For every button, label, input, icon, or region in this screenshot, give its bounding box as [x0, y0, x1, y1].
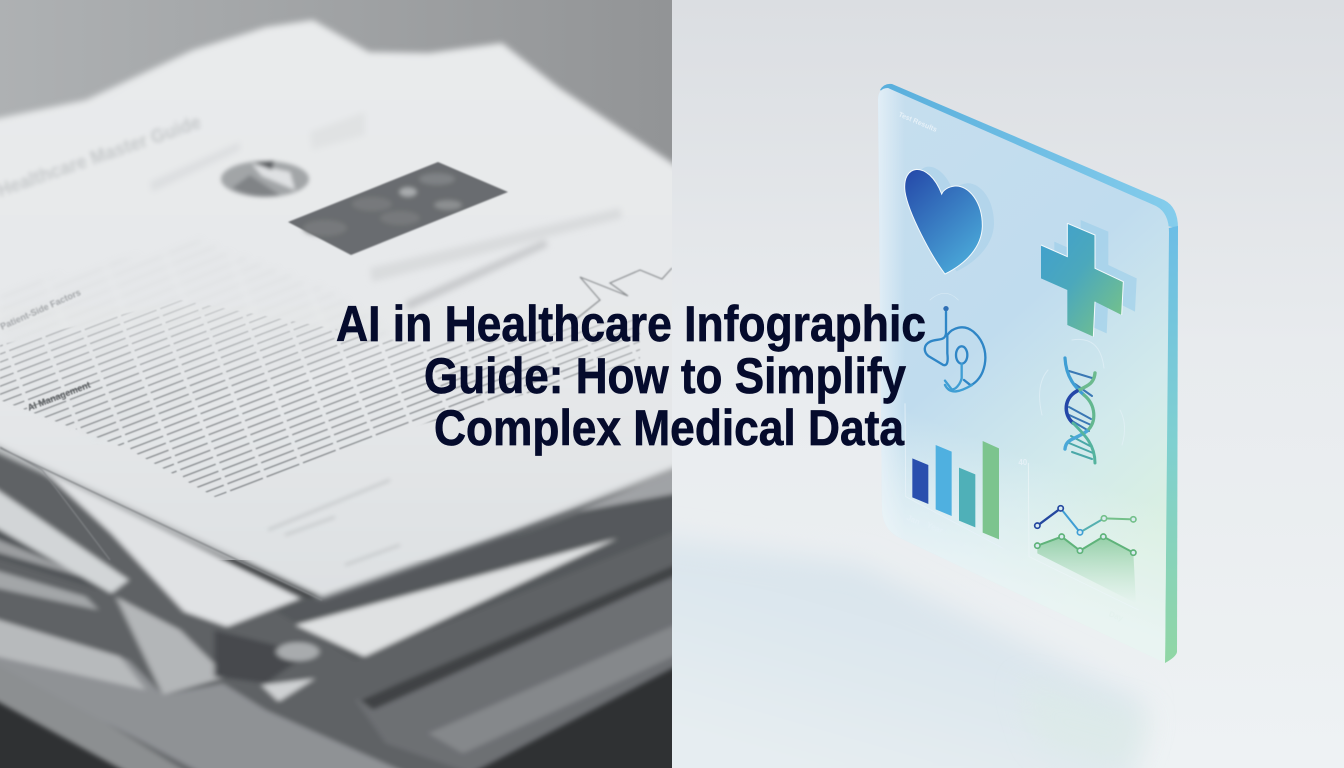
icon: heart: [905, 167, 994, 274]
title line 1: AI in Healthcare Infographic: [336, 296, 926, 352]
title: [336, 296, 926, 456]
sheet edge lines: [0, 447, 322, 600]
blurred caption bars: [150, 112, 622, 310]
faint upper text lines: [0, 240, 400, 440]
floor shadow: [640, 535, 1150, 768]
tablet right edge: [1165, 226, 1178, 663]
body text lines: [0, 300, 640, 497]
tablet front face: [878, 88, 1169, 663]
icon: stethoscope: [925, 293, 985, 389]
sheet sub heading: Patient-Side Factors: [0, 287, 82, 332]
stethoscope base: [945, 385, 972, 391]
tablet bottom fade: [878, 88, 1169, 663]
sheet heading: AI Management: [26, 380, 92, 413]
panel: paper stack photo: [0, 0, 694, 768]
tablet left sheen: [878, 88, 1169, 663]
signature lines: [268, 480, 400, 565]
panel: glass health data tablet: [878, 84, 1178, 663]
lower paper stack: [0, 447, 694, 768]
line chart: 40: [1018, 458, 1028, 467]
title line 2: Guide: How to Simplify: [424, 348, 906, 404]
dark image on paper: [288, 162, 508, 255]
grey backdrop: [0, 0, 672, 560]
icon: medical cross: [1041, 220, 1137, 337]
bar chart: Year: [925, 520, 944, 535]
main top sheet: [0, 20, 690, 598]
line chart: [1018, 458, 1138, 623]
icon: DNA helix: [1040, 339, 1125, 463]
bar chart: Jan: [905, 513, 922, 527]
pie chart on paper: [221, 161, 309, 197]
dark table surface: [0, 560, 672, 768]
tablet top edge: [880, 84, 1178, 228]
mini line chart on paper: [575, 268, 672, 320]
panel: digital side background: [672, 0, 1344, 768]
title line 3: Complex Medical Data: [434, 400, 905, 456]
blurred document title: Healthcare Master Guide: [0, 112, 204, 202]
bar chart: [905, 403, 1003, 548]
panel label: Test Results: [897, 111, 938, 134]
line chart: Day: [1108, 609, 1125, 623]
